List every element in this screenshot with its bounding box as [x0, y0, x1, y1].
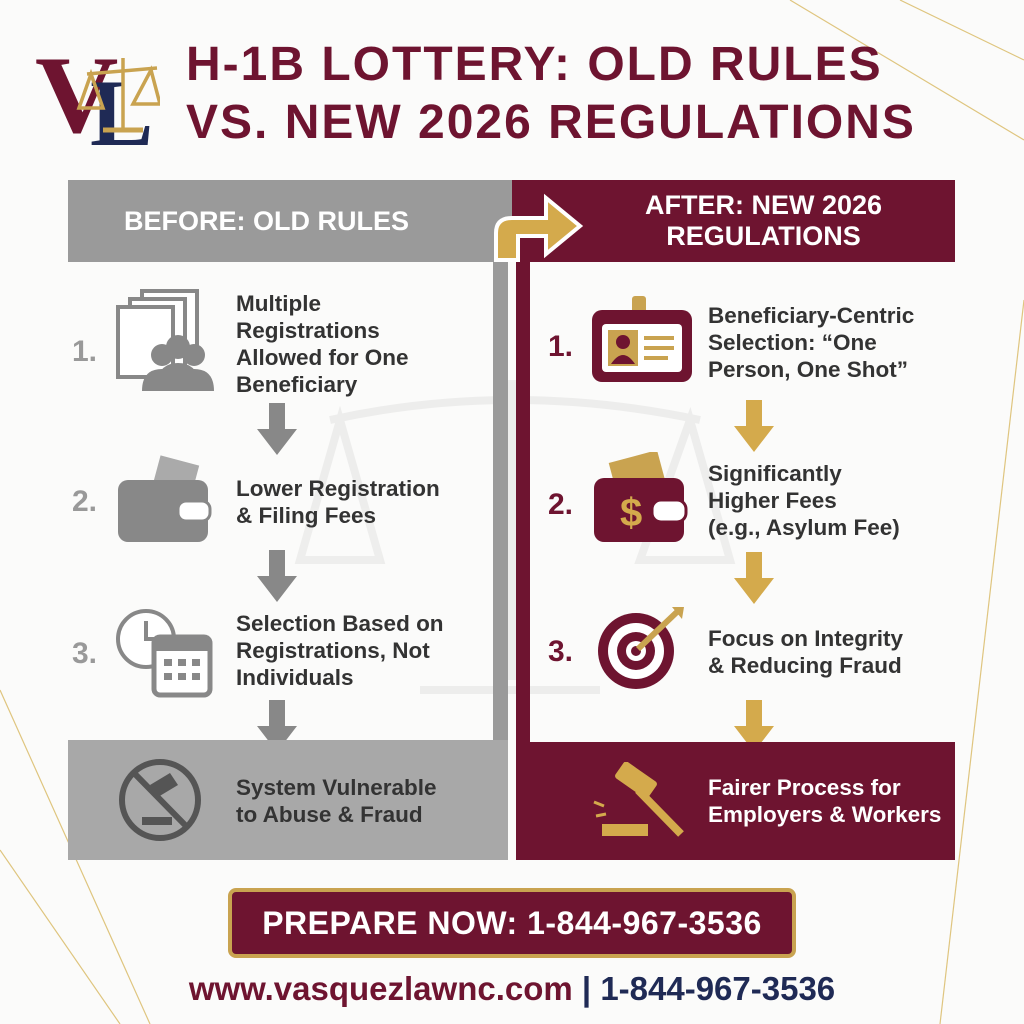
right step 2: $: [620, 491, 642, 535]
arrow: [734, 700, 774, 742]
right step 2: Higher Fees: [708, 488, 837, 513]
left step 3: [72, 609, 444, 698]
left step 3: Registrations, Not: [236, 638, 430, 663]
callout: phone button: [228, 888, 796, 958]
title: H-1B LOTTERY: OLD RULES: [186, 38, 883, 91]
right step 2: 2.: [548, 488, 573, 521]
right step 2: Significantly: [708, 461, 842, 486]
right step 1: Person, One Shot”: [708, 357, 908, 382]
callout: phone button: PREPARE NOW: 1-844-967-3536: [262, 905, 762, 941]
panel: left outcome: to Abuse & Fraud: [236, 802, 423, 827]
right step 1: Selection: “One: [708, 330, 877, 355]
arrow: [734, 400, 774, 452]
arrow: [257, 700, 297, 740]
left step 3: Individuals: [236, 665, 354, 690]
left step 1: [72, 289, 409, 397]
right step 3: 3.: [548, 635, 573, 668]
left step 1: Registrations: [236, 318, 380, 343]
right step 1: 1.: [548, 330, 573, 363]
panel: right outcome: Fairer Process for: [708, 775, 901, 800]
arrow: [734, 552, 774, 604]
left step 2: [72, 455, 440, 542]
arrow: [257, 550, 297, 602]
left step 2: & Filing Fees: [236, 503, 376, 528]
title: VS. NEW 2026 REGULATIONS: [186, 96, 916, 149]
left step 1: Beneficiary: [236, 372, 357, 397]
title: [186, 38, 916, 149]
left step 2: 2.: [72, 485, 97, 518]
panel: after header: AFTER: NEW 2026: [645, 190, 882, 220]
right step 1: [548, 296, 914, 382]
logo: [35, 40, 160, 150]
arrow: [257, 403, 297, 455]
left step 3: 3.: [72, 637, 97, 670]
left step 2: Lower Registration: [236, 476, 440, 501]
left step 3: Selection Based on: [236, 611, 444, 636]
right step 3: Focus on Integrity: [708, 626, 903, 651]
panel: right outcome: Employers & Workers: [708, 802, 941, 827]
left step 1: Allowed for One: [236, 345, 409, 370]
panel: after header: [512, 180, 955, 262]
right step 3: [548, 607, 903, 689]
left step 1: 1.: [72, 335, 97, 368]
right step 1: Beneficiary-Centric: [708, 303, 914, 328]
arrow: transition: [494, 194, 583, 262]
panel: after header: REGULATIONS: [666, 221, 861, 251]
panel: left outcome: System Vulnerable: [236, 775, 437, 800]
right step 2: (e.g., Asylum Fee): [708, 515, 900, 540]
left step 1: Multiple: [236, 291, 321, 316]
panel: right outcome: [516, 742, 955, 860]
panel: before header: BEFORE: OLD RULES: [124, 206, 409, 236]
panel: left outcome: [68, 740, 508, 860]
right step 3: & Reducing Fraud: [708, 653, 902, 678]
footer: www.vasquezlawnc.com | 1-844-967-3536: [189, 970, 835, 1007]
panel: before header: [68, 180, 512, 262]
right step 2: [548, 452, 900, 542]
